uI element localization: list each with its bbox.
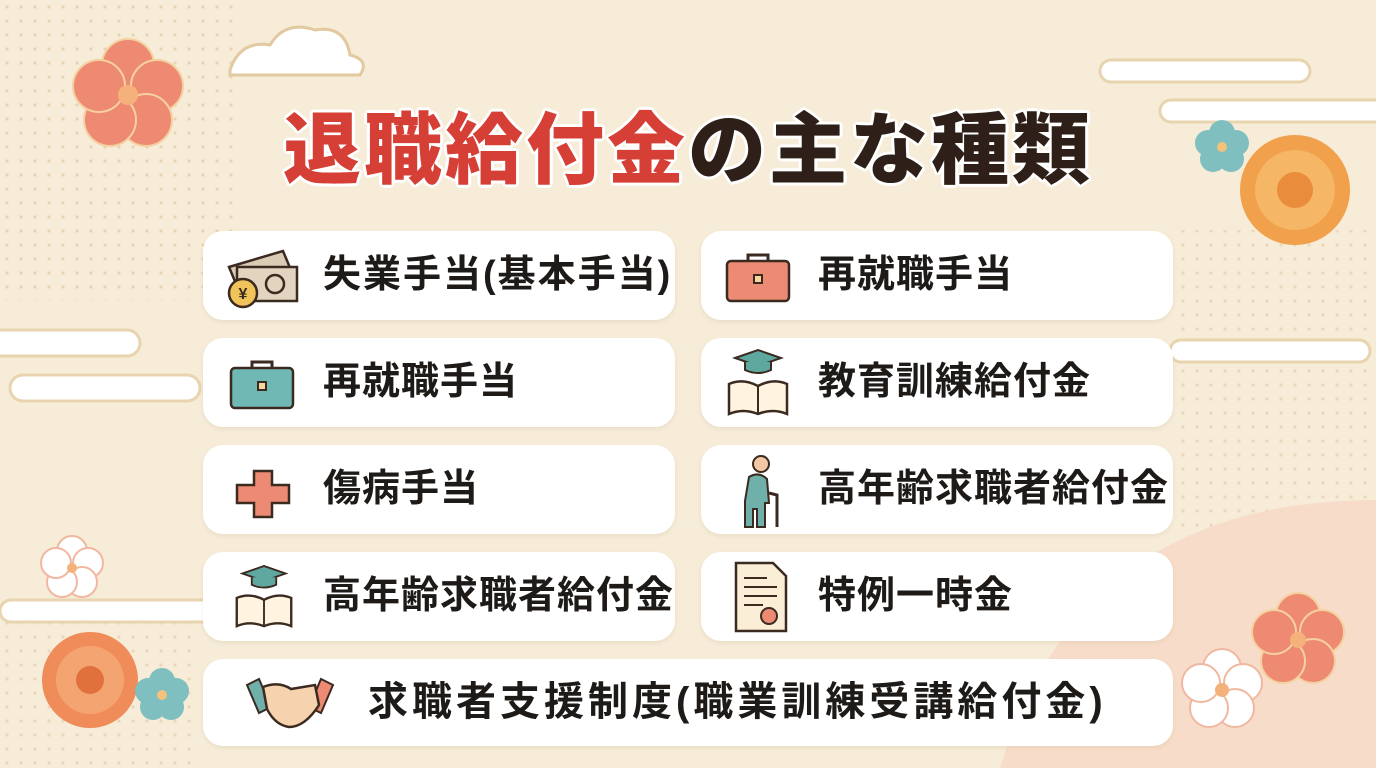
icon: handshake xyxy=(246,678,334,728)
card: 高年齢求職者給付金 left xyxy=(203,552,675,641)
icon: briefcase teal xyxy=(230,360,294,410)
card: 失業手当 xyxy=(203,231,675,320)
icon: certificate xyxy=(734,562,788,632)
flowers xyxy=(73,39,183,146)
card: 再就職手当 right: 再就職手当 xyxy=(818,254,1013,296)
card: 教育訓練給付金 xyxy=(701,338,1173,427)
card: 傷病手当 xyxy=(203,445,675,534)
icon: elderly person xyxy=(744,455,778,528)
card: 教育訓練給付金: 教育訓練給付金 xyxy=(818,361,1091,403)
icon: book with cap xyxy=(728,349,788,416)
icon: money xyxy=(227,250,298,308)
icon: money: ¥ xyxy=(239,286,248,303)
card: 特例一時金: 特例一時金 xyxy=(818,575,1013,617)
card: 再就職手当 left xyxy=(203,338,675,427)
card: 特例一時金 xyxy=(701,552,1173,641)
card: 求職者支援制度 xyxy=(203,659,1173,746)
card: 高年齢求職者給付金 right xyxy=(701,445,1173,534)
card: 高年齢求職者給付金 left: 高年齢求職者給付金 xyxy=(323,575,674,617)
card: 傷病手当: 傷病手当 xyxy=(323,468,479,510)
icon: briefcase red xyxy=(726,254,790,302)
title: 退職給付金の主な種類 xyxy=(283,106,1093,194)
card: 失業手当: 失業手当(基本手当) xyxy=(323,254,672,296)
card: 求職者支援制度: 求職者支援制度(職業訓練受講給付金) xyxy=(368,680,1107,724)
card: 高年齢求職者給付金 right: 高年齢求職者給付金 xyxy=(818,468,1169,510)
icon: cross xyxy=(236,470,290,518)
icon: book with cap xyxy=(236,565,292,628)
card: 再就職手当 right xyxy=(701,231,1173,320)
card: 再就職手当 left: 再就職手当 xyxy=(323,361,518,403)
